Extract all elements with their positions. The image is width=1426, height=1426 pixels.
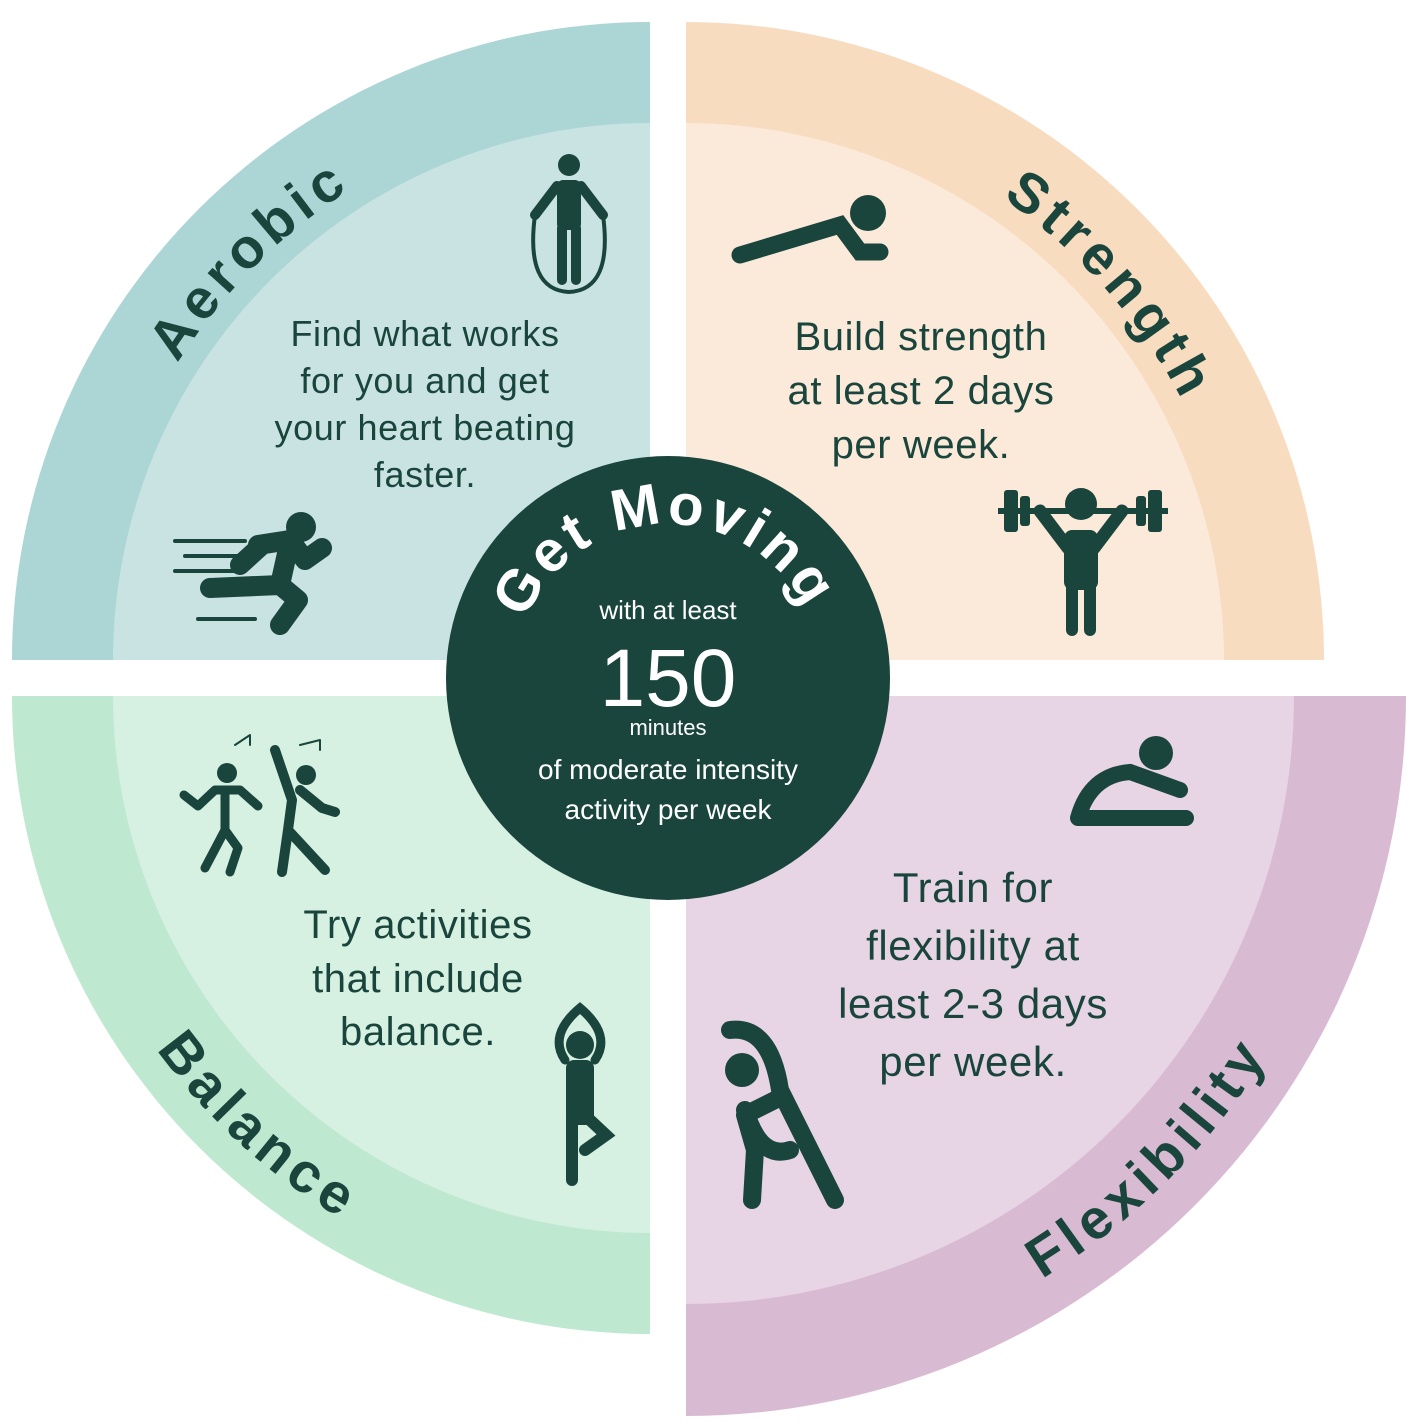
text: aerobic description: Find what works [290, 313, 560, 354]
icon: seated stretch [1078, 736, 1186, 818]
text: aerobic description: your heart beating [274, 407, 576, 448]
text: flexibility description: Train for [893, 864, 1053, 911]
text: balance description: that include [312, 957, 524, 1001]
text: strength description: Build strength [794, 315, 1048, 359]
text: 150 minutes: minutes [629, 715, 707, 740]
heading: Get Moving: Get Moving [496, 484, 830, 611]
icon: dancers [184, 735, 335, 872]
text: balance description: Try activities [303, 903, 533, 947]
heading: Aerobic: Aerobic [154, 171, 342, 362]
text: flexibility description: least 2-3 days [838, 980, 1108, 1027]
icon: side bend [725, 1030, 835, 1200]
text: 150 minutes [538, 595, 798, 825]
icon: runner [175, 512, 322, 625]
icon: weightlifter [998, 488, 1168, 630]
text: aerobic description: for you and get [300, 360, 550, 401]
icon: jump rope [533, 154, 605, 292]
text: 150 minutes: of moderate intensity [538, 754, 798, 785]
heading: Balance: Balance [158, 1028, 349, 1213]
text: strength description: per week. [832, 423, 1010, 467]
heading: Flexibility: Flexibility [1024, 1041, 1265, 1278]
panel: flexibility [686, 696, 1406, 1416]
icon: yoga tree pose [559, 1008, 606, 1180]
text: aerobic description: faster. [374, 454, 476, 495]
text: 150 minutes: with at least [598, 595, 737, 625]
icon: plank [740, 195, 886, 255]
text: 150 minutes: activity per week [565, 794, 772, 825]
center circle [446, 456, 890, 900]
text: strength description: at least 2 days [788, 369, 1054, 413]
text: flexibility description: per week. [879, 1038, 1067, 1085]
panel: strength [686, 22, 1324, 660]
panel: aerobic [12, 22, 650, 660]
text: balance description: balance. [340, 1010, 496, 1054]
heading: Strength: Strength [1008, 172, 1206, 396]
text: 150 minutes: 150 [600, 633, 736, 724]
text: flexibility description: flexibility at [866, 922, 1080, 969]
panel: balance [12, 696, 650, 1334]
